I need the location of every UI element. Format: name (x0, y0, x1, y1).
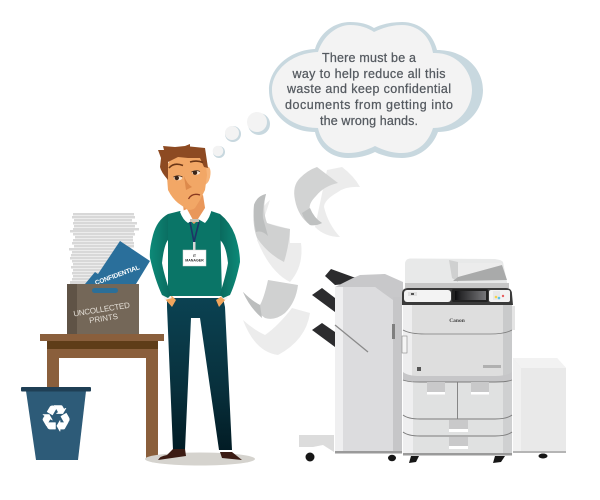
recycling bin (21, 387, 91, 460)
finisher slot (335, 325, 368, 352)
mouth (188, 194, 200, 199)
copier main unit (402, 258, 515, 456)
icon: recycle: ♻ (40, 399, 72, 440)
confidential folder (85, 241, 150, 287)
section line (403, 330, 512, 334)
eyebrows (169, 161, 203, 168)
neck (183, 195, 206, 224)
finisher handle (392, 324, 395, 339)
folder label: CONFIDENTIAL (94, 264, 141, 287)
box label: UNCOLLECTED (73, 301, 131, 318)
copier body (403, 304, 512, 382)
nose shadow (184, 176, 192, 190)
name badge: IT (193, 254, 197, 258)
paper drawers (403, 380, 512, 453)
uncollected prints box (67, 284, 139, 334)
paper: fourth (243, 308, 310, 355)
document feeder (449, 260, 458, 282)
shoes (158, 449, 242, 460)
collar (180, 208, 212, 223)
eyes (174, 170, 200, 180)
desk (40, 334, 164, 460)
finisher top cap (335, 274, 403, 300)
cloud fill (272, 25, 472, 153)
right sleeve (220, 214, 240, 298)
thought text: the wrong hands. (320, 114, 418, 128)
hair (158, 144, 208, 180)
thought text: documents from getting into (285, 98, 453, 112)
ear (205, 167, 211, 185)
scanner lid (405, 258, 508, 287)
power button (417, 367, 421, 371)
copier finisher (299, 269, 403, 454)
finisher foot (299, 435, 334, 452)
sweater (168, 210, 222, 296)
thought text: waste and keep confidential (286, 82, 451, 96)
door latch (402, 336, 407, 353)
paper: top (294, 167, 360, 237)
lanyard (190, 222, 199, 242)
trousers (167, 298, 232, 450)
paper: third (243, 280, 298, 319)
lower body band (403, 372, 512, 382)
name badge: MANAGER (185, 258, 204, 262)
box handle (92, 288, 118, 293)
cloud shadow (269, 22, 483, 158)
hands (165, 296, 226, 307)
thought text: There must be a (322, 51, 416, 65)
name badge (183, 242, 206, 266)
left sleeve (150, 214, 171, 298)
thought bubbles (213, 112, 270, 158)
brand: Canon (449, 318, 465, 324)
finisher front (335, 287, 402, 453)
head (167, 157, 207, 210)
manager figure (145, 144, 255, 466)
control panel (402, 288, 513, 305)
thought text (285, 51, 453, 128)
thought cloud (269, 22, 483, 158)
paper stack (69, 213, 139, 284)
box label: PRINTS (89, 312, 119, 325)
model label (483, 365, 501, 368)
cuffs (163, 295, 228, 300)
ground shadow (145, 452, 255, 466)
copier wheels (306, 452, 548, 463)
output trays (312, 269, 363, 347)
paper: second (253, 194, 302, 282)
flying papers (243, 167, 360, 355)
copier side deck (513, 358, 566, 453)
thought text: way to help reduce all this (292, 67, 446, 81)
